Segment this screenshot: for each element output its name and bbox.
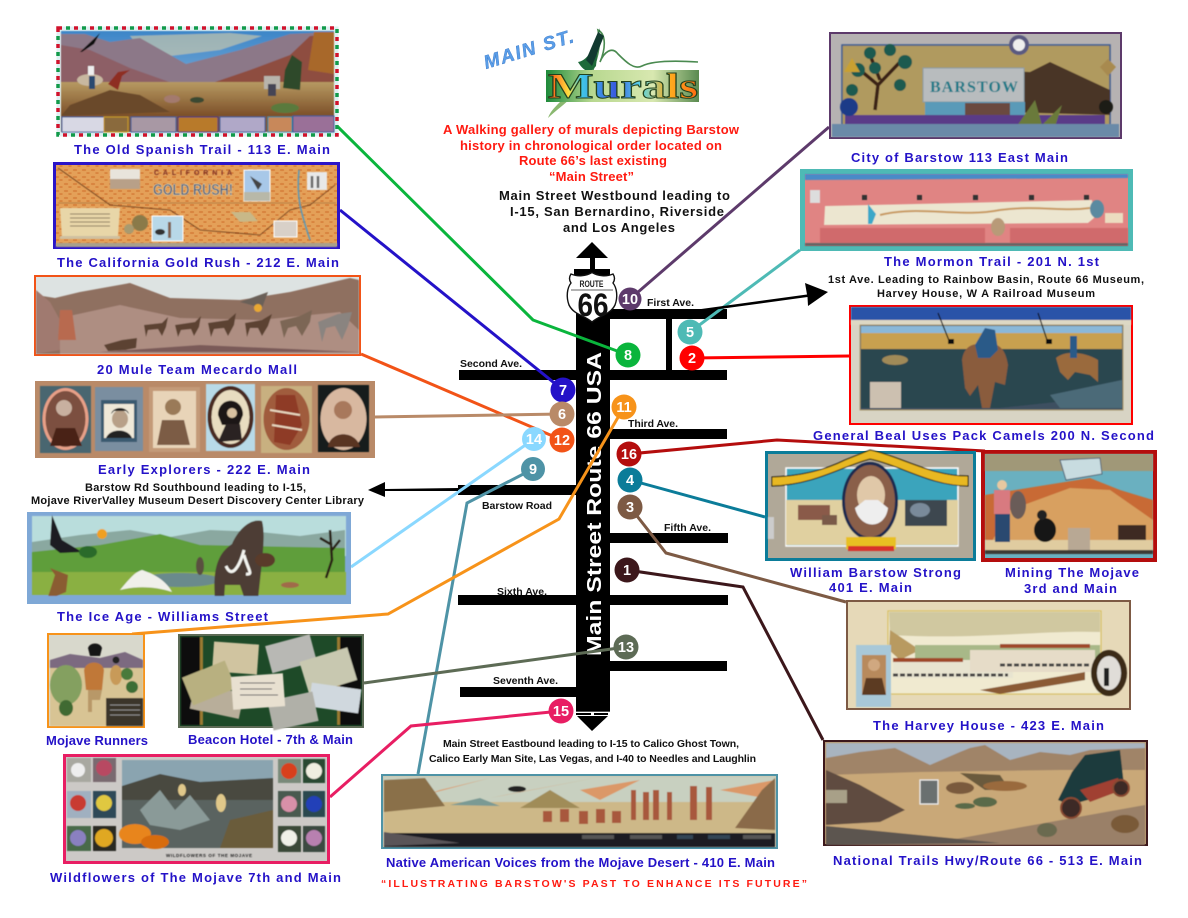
marker 10 (618, 288, 642, 310)
panel: California Gold Rush mural: CALIFORNIA (154, 170, 232, 177)
marker 13: 13 (618, 640, 634, 656)
caption: Wildflowers: Wildflowers of The Mojave 7th and Main (50, 870, 341, 885)
marker 7 (550, 378, 576, 402)
marker 2 (680, 346, 704, 370)
panel: Early Explorers mural (35, 381, 375, 458)
eastbound directions (429, 738, 756, 765)
First Ave directions: Harvey House, W A Railroad Museum (877, 288, 1095, 300)
logo: Main St. Murals: Murals (548, 66, 698, 106)
caption: Old Spanish Trail: The Old Spanish Trail - 113 E. Main (74, 142, 330, 157)
eastbound directions: Main Street Eastbound leading to I-15 to Calico Ghost Town, (443, 738, 739, 750)
panel: California Gold Rush mural (54, 164, 338, 248)
panel: Mining the Mojave mural (983, 452, 1155, 560)
connector 5 (690, 250, 800, 332)
marker 8: 8 (624, 348, 632, 364)
intro text: history in chronological order located on (460, 138, 722, 153)
marker 16 (616, 442, 642, 466)
panel: Native American Voices mural (382, 775, 777, 848)
marker 6: 6 (558, 407, 566, 423)
caption: William Barstow Strong (790, 565, 961, 595)
caption: General Beale: General Beal Uses Pack Camels 200 N. Second (813, 428, 1154, 443)
tagline: “ILLUSTRATING BARSTOW'S PAST TO ENHANCE ITS FUTURE” (381, 878, 807, 890)
marker 5 (678, 320, 702, 344)
marker 12 (550, 428, 574, 452)
connector 4 (630, 480, 765, 517)
street names: Third Ave. (628, 418, 678, 430)
street names: Seventh Ave. (493, 675, 558, 687)
marker 8 (616, 342, 640, 368)
connector 15 (330, 711, 561, 797)
First Ave directions (828, 274, 1144, 300)
caption: Mojave Runners: Mojave Runners (46, 733, 148, 748)
connector 13 (364, 647, 626, 683)
street map (458, 242, 728, 731)
westbound directions (499, 188, 730, 235)
panel: National Trails Highway mural (824, 741, 1147, 845)
connector 3 (630, 507, 846, 602)
caption: California Gold Rush: The California Gold Rush - 212 E. Main (57, 255, 339, 270)
logo: Main St. Murals (481, 27, 699, 118)
street names: Sixth Ave. (497, 586, 547, 598)
westbound directions: Main Street Westbound leading to (499, 188, 730, 203)
marker 15: 15 (553, 704, 569, 720)
panel: California Gold Rush mural: GOLD RUSH! (153, 182, 233, 199)
caption: 20 Mule Team: 20 Mule Team Mecardo Mall (97, 362, 297, 377)
marker 11: 11 (616, 400, 632, 416)
logo: Main St. Murals: MAIN ST. (481, 27, 576, 74)
marker 9: 9 (529, 462, 537, 478)
marker 6 (550, 402, 574, 426)
marker 3: 3 (626, 500, 634, 516)
marker 13 (614, 634, 638, 660)
panel: Wildflowers mural (64, 756, 328, 862)
caption: Mormon Trail: The Mormon Trail - 201 N. 1st (884, 254, 1100, 269)
street names: First Ave. (647, 297, 694, 309)
arrow: First Ave east (694, 283, 828, 312)
intro text: Route 66’s last existing (519, 153, 667, 168)
street names: Barstow Road (482, 500, 552, 512)
connector 12 (361, 354, 562, 440)
panel: Harvey House mural (847, 601, 1130, 709)
caption: Mining the Mojave: 3rd and Main (1024, 581, 1117, 596)
connector 7 (340, 210, 563, 390)
caption: Beacon Hotel: Beacon Hotel - 7th & Main (188, 732, 353, 747)
arrow: Barstow Road west (368, 482, 458, 497)
route 66 shield (567, 269, 617, 323)
westbound directions: I-15, San Bernardino, Riverside (510, 204, 724, 219)
caption: Harvey House: The Harvey House - 423 E. Main (873, 718, 1104, 733)
intro text (443, 122, 740, 184)
caption: William Barstow Strong: 401 E. Main (829, 580, 912, 595)
street names: Fifth Ave. (664, 522, 711, 534)
panel: General Beale camels mural (850, 306, 1132, 424)
arrow: south (576, 711, 610, 731)
intro text: “Main Street” (549, 169, 634, 184)
caption: Mining the Mojave (1005, 565, 1139, 596)
marker 11 (612, 394, 636, 420)
connector 11 (132, 407, 624, 634)
panel: City of Barstow mural (830, 33, 1121, 138)
marker 3 (618, 494, 642, 520)
marker 9 (521, 457, 545, 481)
arrow: north (576, 242, 608, 270)
Barstow Road directions: Barstow Rd Southbound leading to I-15, (85, 482, 306, 494)
marker 1 (614, 558, 640, 582)
caption: Native American Voices: Native American Voices from the Mojave Desert - 410 E. Main (386, 855, 775, 870)
vertical road title: Main Street Route 66 USA (584, 352, 606, 656)
First Ave directions: 1st Ave. Leading to Rainbow Basin, Route 66 Museum, (828, 274, 1144, 286)
connector 6 (375, 414, 562, 417)
marker 2: 2 (688, 351, 696, 367)
connector 1 (627, 570, 823, 740)
marker 14 (522, 427, 546, 451)
westbound directions: and Los Angeles (563, 220, 675, 235)
marker 5: 5 (686, 325, 694, 341)
caption: Mining the Mojave: Mining The Mojave (1005, 565, 1139, 580)
connector 9 (418, 469, 533, 774)
street names: Second Ave. (460, 358, 522, 370)
panel: Old Spanish Trail mural (58, 28, 337, 135)
marker 7: 7 (559, 383, 567, 399)
marker 4: 4 (626, 473, 634, 489)
main street bar (576, 270, 610, 711)
marker 10: 10 (622, 292, 638, 308)
panel: William Barstow Strong mural (766, 450, 974, 560)
panel: 20 Mule Team mural (35, 276, 360, 355)
Barstow Road directions: Mojave RiverValley Museum Desert Discovery Center Library (31, 495, 365, 507)
connector 2 (692, 356, 849, 358)
panel: Mormon Trail mural (802, 172, 1130, 248)
intro text: A Walking gallery of murals depicting Barstow (443, 122, 740, 137)
caption: National Trails Highway: National Trails Hwy/Route 66 - 513 E. Main (833, 853, 1142, 868)
caption: City of Barstow: City of Barstow 113 East Main (851, 150, 1068, 165)
marker 1: 1 (623, 563, 631, 579)
street names (460, 297, 711, 687)
marker 4 (618, 468, 642, 492)
panel: Ice Age mural (27, 512, 351, 604)
Barstow Road directions (31, 482, 365, 507)
marker 15 (548, 698, 574, 724)
connector 10 (630, 127, 829, 299)
marker 16: 16 (621, 447, 637, 463)
panel: Beacon Hotel mural (179, 634, 363, 730)
marker 14: 14 (526, 432, 542, 448)
caption: Early Explorers: Early Explorers - 222 E. Main (98, 462, 310, 477)
panel: City of Barstow mural: BARSTOW (930, 79, 1018, 96)
eastbound directions: Calico Early Man Site, Las Vegas, and I-40 to Needles and Laughlin (429, 753, 756, 765)
marker 12: 12 (554, 433, 570, 449)
cross streets (458, 309, 728, 697)
connector 8 (338, 127, 628, 355)
panel: Wildflowers mural: WILDFLOWERS OF THE MOJAVE (166, 853, 252, 858)
connector 16 (629, 440, 985, 454)
connector 14 (351, 439, 534, 567)
panel: Mojave Runners mural (48, 634, 144, 727)
route 66 shield: ROUTE (580, 279, 604, 289)
route 66 shield: 66 (578, 287, 608, 323)
caption: William Barstow Strong: William Barstow Strong (790, 565, 961, 580)
caption: The Ice Age: The Ice Age - Williams Street (57, 609, 269, 624)
